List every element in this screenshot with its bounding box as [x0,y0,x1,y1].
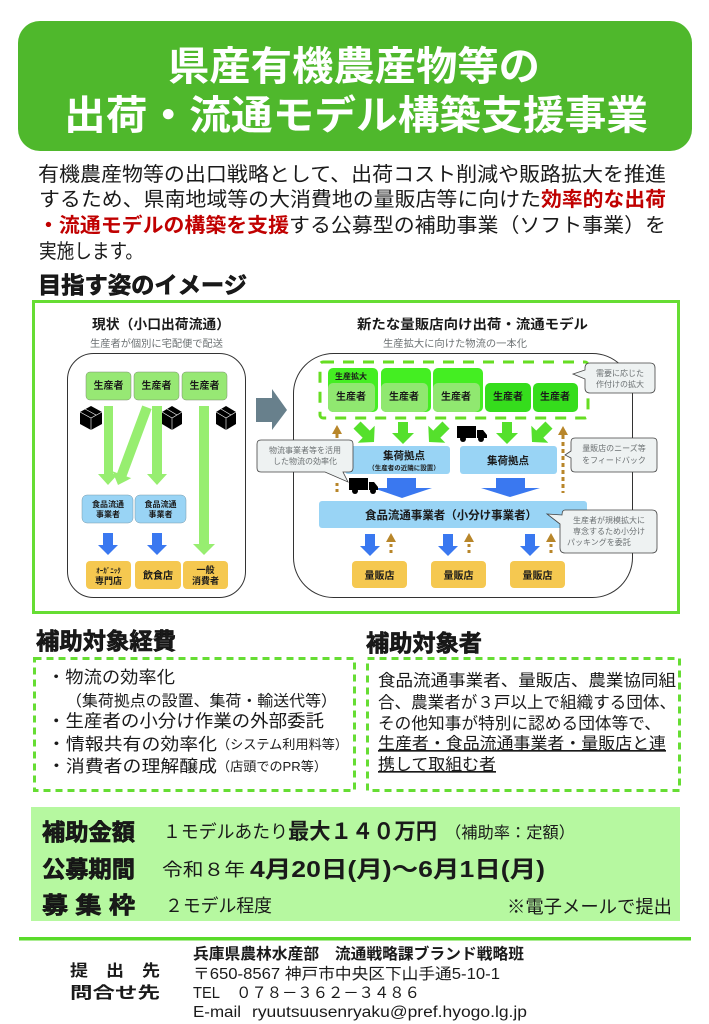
collection hubs: 集荷拠点 [383,449,425,462]
food distributors [82,495,186,523]
panel: eligible applicants: その他知事が特別に認める団体等で、 [378,714,661,733]
heading: target image: 目指す姿のイメージ [38,272,247,298]
number of models [42,892,672,918]
contact details [193,944,527,1021]
food distributors: 事業者 [148,509,172,519]
number of models: 募 集 枠 [42,892,135,918]
callout: logistics: 物流事業者等を活用 [269,445,341,455]
intro text block: するため、県南地域等の大消費地の量販店等に向けた [39,188,541,211]
retail destinations: 消費者 [192,575,219,586]
panel: eligible applicants: 食品流通事業者、量販店、農業協同組 [378,671,676,690]
green collection arrows [349,417,557,450]
mass retailers [352,561,565,588]
callout: feedback: 量販店のニーズ等 [582,443,646,453]
callout: packing: 専念するため小分け [573,526,645,536]
subsidy amount: １モデルあたり [163,822,288,842]
application period: 公募期間 [42,856,135,882]
retail destinations: 一般 [196,564,215,575]
new model subheading: 生産拡大に向けた物流の一本化 [383,337,527,350]
number of models: ※電子メールで提出 [507,897,672,917]
title banner [18,21,692,151]
callout: demand [573,363,655,393]
collection hubs [345,446,557,474]
panel: eligible applicants: 合、農業者が３戸以上で組織する団体、 [378,693,676,712]
current state heading: 現状（小口出荷流通） [92,316,230,332]
intro text block: する公募型の補助事業（ソフト事業）を [289,214,666,237]
producers expansion group: 生産者 [336,390,366,403]
application period [42,856,545,882]
intro text block: 実施します。 [39,240,143,263]
food distributors: 食品流通 [92,499,124,509]
callout: logistics: した物流の効率化 [273,456,337,466]
application period: 4月20日(月)～6月1日(月) [250,856,545,882]
panel: eligible applicants: 携して取組む者 [378,755,496,774]
collection hubs: 集荷拠点 [487,454,529,467]
new model heading: 新たな量販店向け出荷・流通モデル [357,316,589,332]
mass retailers: 量販店 [364,570,394,582]
icon: truck [457,426,487,442]
collection hubs: （生産者の近隣に設置） [368,463,440,472]
brown feedback arrows upper [332,425,568,493]
heading: eligible expenses: 補助対象経費 [36,628,176,654]
contact details: E-mail [193,1004,241,1021]
producers expansion group: 生産者 [441,390,471,403]
heading: eligible applicants: 補助対象者 [366,630,482,656]
producers row [86,372,227,400]
contact details: ryuutsuusenryaku@pref.hyogo.lg.jp [252,1004,527,1021]
panel: eligible applicants: 生産者・食品流通事業者・量販店と連 [378,734,666,753]
producers expansion group: 生産者 [493,390,523,403]
contact details: 兵庫県農林水産部 流通戦略課ブランド戦略班 [193,944,524,963]
panel: subsidy summary [31,807,680,921]
title banner: 県産有機農産物等の [168,45,540,89]
panel: target image diagram [34,302,678,612]
panel: eligible expenses: ・生産者の小分け作業の外部委託 [47,711,324,731]
callout: demand: 作付けの拡大 [596,379,644,389]
contact details: TEL [193,985,220,1002]
current state frame [68,354,246,598]
mass retailers: 量販店 [444,570,474,582]
callout: packing: 生産者が規模拡大に [573,515,645,525]
blue arrows [98,533,167,555]
contact labels [70,961,160,1002]
producers expansion group [320,362,588,418]
panel: new model [257,316,657,598]
divider [19,937,691,940]
application period: 令和８年 [162,860,245,880]
subsidy amount: 最大１４０万円 [288,819,437,844]
panel: eligible expenses [34,658,354,790]
producers row: 生産者 [142,379,172,392]
food distributor bar [319,501,587,528]
contact labels: 提 出 先 [70,961,160,980]
contact details: 〒650-8567 神戸市中央区下山手通5-10-1 [193,965,500,983]
callout: feedback: をフィードバック [582,456,646,465]
callout: packing [547,510,657,553]
icon: parcels [80,406,236,430]
retail destinations: 飲食店 [143,569,173,582]
contact details: ０７８－３６２－３４８６ [236,985,420,1002]
mass retailers: 量販店 [522,570,552,582]
intro text block: 有機農産物等の出口戦略として、出荷コスト削減や販路拡大を推進 [38,163,666,186]
callout: packing: パッキングを委託 [567,537,631,547]
food distributors: 食品流通 [144,499,176,509]
delivery and feedback arrows [360,533,556,556]
big blue arrows [373,478,540,498]
panel: eligible expenses: （店頭でのPR等） [217,759,327,774]
panel: eligible expenses: ・消費者の理解醸成 [47,757,217,776]
producers expansion group: 生産拡大 [335,371,367,381]
panel: eligible expenses: ・物流の効率化 [47,668,175,687]
callout: feedback [565,438,657,472]
panel: eligible applicants [368,658,680,790]
subsidy amount: （補助率：定額） [445,824,575,842]
title banner: 出荷・流通モデル構築支援事業 [64,93,648,138]
retail destinations [86,561,228,589]
panel: eligible expenses: （集荷拠点の設置、集荷・輸送代等） [66,692,337,710]
panel: eligible expenses: （システム利用料等） [217,737,348,752]
intro text block: ・流通モデルの構築を支援 [38,213,289,237]
number of models: ２モデル程度 [165,896,272,916]
retail destinations: ｵｰｶﾞﾆｯｸ [96,567,121,575]
producers expansion group: 生産者 [540,390,570,403]
callout: demand: 需要に応じた [596,369,644,378]
panel: eligible expenses: ・情報共有の効率化 [47,735,217,754]
retail destinations: 専門店 [95,575,122,586]
producers expansion group: 生産者 [389,390,419,403]
food distributor bar: 食品流通事業者（小分け事業者） [365,508,537,522]
contact labels: 問合せ先 [70,983,160,1002]
current state subheading: 生産者が個別に宅配便で配送 [90,337,223,350]
food distributors: 事業者 [96,509,120,519]
intro text block [38,163,666,263]
subsidy amount [42,819,575,845]
subsidy amount: 補助金額 [42,819,135,845]
intro text block: 効率的な出荷 [541,188,666,211]
green shipping arrows [98,404,215,555]
new model frame [294,354,632,598]
producers row: 生産者 [94,379,124,392]
icon: truck lower [349,478,378,494]
producers row: 生産者 [190,379,220,392]
panel: current state [68,316,246,598]
callout: logistics [257,440,353,482]
arrow: current to new [256,389,287,430]
